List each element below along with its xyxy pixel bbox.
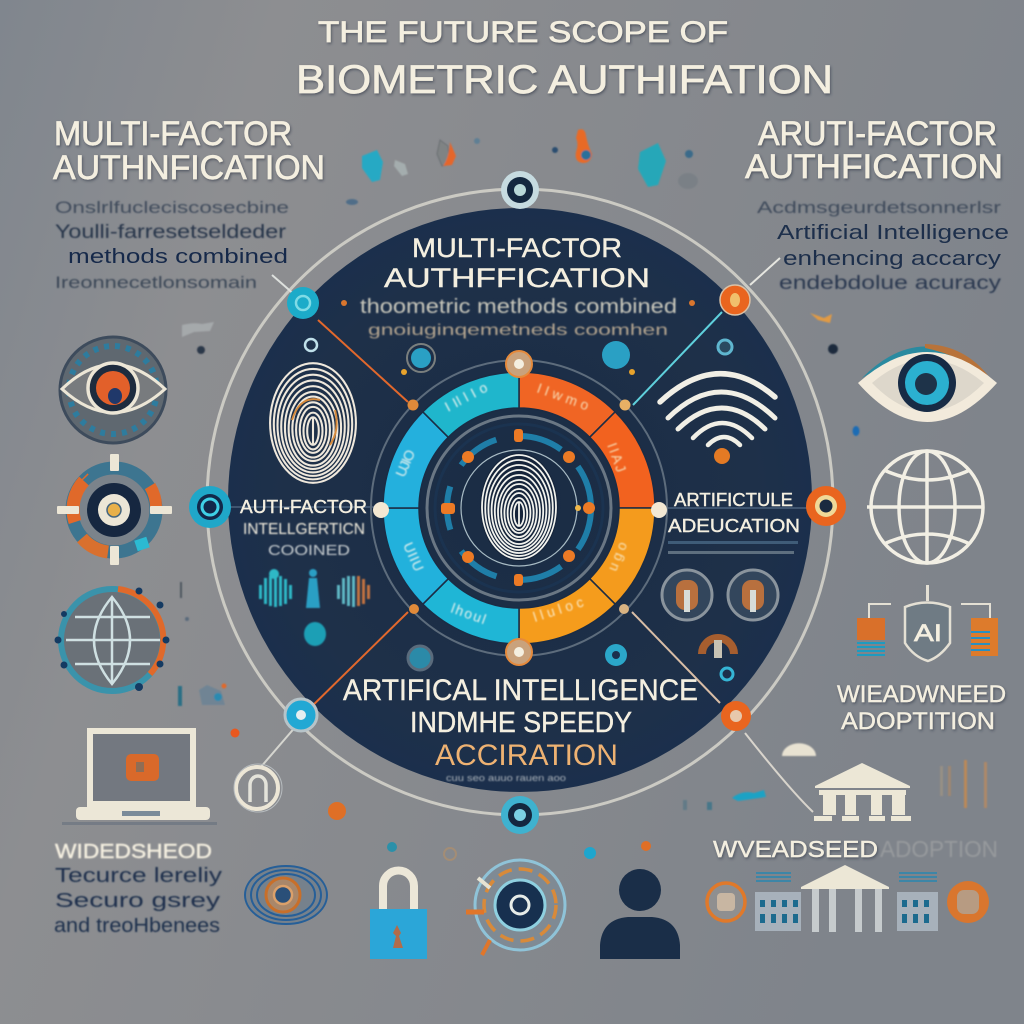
- text block: right description: [757, 198, 1009, 294]
- text block: left bottom widespread: Securo gsrey: [55, 890, 220, 912]
- icon: right globe: [867, 451, 983, 563]
- title: BIOMETRIC AUTHIFATION: [296, 58, 833, 102]
- donut chart ring: [371, 360, 667, 656]
- icon: AI shield with tags: [857, 585, 998, 661]
- small icons below left globe: [178, 582, 226, 706]
- disc bottom heading: ACCIRATION: [435, 739, 618, 772]
- icon: padlock: [370, 870, 427, 959]
- panel: right inner label: ADEUCATION: [668, 516, 800, 536]
- text block: right description: endebdolue acuracy: [779, 273, 1002, 294]
- inner orange nodes: [441, 429, 595, 586]
- icons: left stripe trio: [259, 569, 370, 646]
- perimeter nodes: [189, 171, 846, 834]
- central dark disc: [228, 208, 812, 792]
- icon: top small temple dome: [683, 743, 816, 810]
- panel: left inner label: INTELLGERTICN: [243, 521, 365, 538]
- outer ring: [207, 189, 833, 815]
- segment labels: ugo: [604, 539, 630, 573]
- text block: left description: Onslrlfucleciscosecbine: [55, 198, 289, 217]
- heading: widespread adoption: [837, 681, 1006, 735]
- icon: central bottom biometric circle: [466, 860, 565, 955]
- disc bottom heading: INDMHE SPEEDY: [410, 707, 632, 739]
- panel: right inner label: ARTIFICTULE: [674, 490, 793, 510]
- heading: widespread bottom: WVEADSEED: [713, 836, 878, 862]
- disc bottom heading: [343, 674, 698, 783]
- text block: right description: Artificial Intelligence: [777, 222, 1009, 244]
- segment nodes: [373, 351, 667, 665]
- connector lines: [225, 258, 813, 812]
- icon: left eye: [60, 337, 166, 443]
- disc small icons: [305, 339, 733, 680]
- heading: left multi-factor authentication: MULTI-FACTOR: [54, 115, 292, 153]
- segment labels: lhoul: [449, 600, 488, 627]
- disc heading: multi-factor authentication: MULTI-FACTOR: [412, 233, 622, 263]
- title: THE FUTURE SCOPE OF: [318, 16, 728, 49]
- panel: left inner label: COOINED: [268, 542, 350, 559]
- icon: fingerprint eye oval: [245, 866, 327, 924]
- disc heading: multi-factor authentication: thoometric methods combined: [360, 296, 677, 318]
- text block: left bottom widespread: WIDEDSHEOD: [55, 841, 212, 863]
- panel: right inner label: [668, 490, 800, 554]
- disc bottom heading: ARTIFICAL INTELLIGENCE: [343, 674, 698, 707]
- center fingerprint: [480, 453, 558, 561]
- heading: widespread bottom: ADOPTION: [880, 836, 998, 862]
- title: [296, 16, 833, 102]
- heading: widespread bottom: [713, 836, 998, 862]
- panel: left inner label: AUTI-FACTOR: [240, 497, 367, 517]
- disc heading: multi-factor authentication: [341, 233, 695, 339]
- icon: right eye: [858, 344, 997, 422]
- icon: laptop: [62, 731, 217, 825]
- disc bottom heading: cuu seo auuo rauen aoo: [446, 773, 566, 783]
- heading: widespread adoption: ADOPTITION: [841, 708, 995, 735]
- icon: institution upper: [814, 763, 911, 821]
- text block: left description: [55, 198, 289, 292]
- icon: wifi waves: [660, 374, 775, 464]
- disc heading: multi-factor authentication: gnoiuginqemetneds coomhen: [368, 322, 668, 339]
- icon: AI shield with tags: AI: [914, 620, 942, 647]
- orange dots: [230, 728, 651, 860]
- icon: person: [600, 869, 680, 959]
- disc heading: multi-factor authentication: AUTHFFICATION: [384, 263, 650, 293]
- icon: small fingerprint circle: [234, 764, 282, 812]
- text block: right description: enhencing accarcy: [783, 248, 1001, 270]
- segment labels: I Il l I o: [442, 379, 490, 415]
- icon: gear target: [57, 454, 172, 565]
- heading: right artificial intelligence: ARUTI-FACTOR: [758, 115, 997, 153]
- inner rings: [427, 416, 611, 600]
- heading: right artificial intelligence: AUTHFICATION: [745, 148, 1003, 186]
- icons: right inner portrait circles: [662, 570, 778, 658]
- text block: left bottom widespread: [54, 841, 222, 937]
- text block: left description: methods combined: [68, 246, 288, 268]
- text block: left bottom widespread: and treoHbenees: [54, 915, 220, 937]
- text block: left description: Ireonnecetlonsomain: [55, 273, 257, 292]
- icon: left globe: [54, 588, 170, 691]
- segment labels: IIAJ: [604, 441, 629, 474]
- text block: right description: Acdmsgeurdetsonnerlsr: [757, 198, 1001, 217]
- segment labels: lluloc: [531, 594, 585, 625]
- icon: faded pens: [940, 760, 987, 808]
- decorative top icons: [346, 129, 698, 205]
- heading: left multi-factor authentication: [53, 115, 325, 187]
- panel: left fingerprint: [270, 363, 356, 483]
- heading: right artificial intelligence: [745, 115, 1003, 186]
- icon: small marks near left eye and right eye: [182, 313, 860, 436]
- panel: left inner label: [240, 497, 367, 559]
- segment labels: UJIO: [392, 447, 418, 479]
- segment labels: IIwmo: [535, 380, 591, 413]
- segment labels: [392, 379, 630, 627]
- heading: left multi-factor authentication: AUTHNFICATION: [53, 149, 325, 187]
- heading: widespread adoption: WIEADWNEED: [837, 681, 1006, 708]
- text block: left bottom widespread: Tecurce lereliy: [55, 865, 222, 887]
- text block: left description: Youlli-farresetseldeder: [55, 222, 287, 243]
- icon: institution row: [707, 865, 989, 932]
- segment labels: UIIU: [400, 540, 427, 574]
